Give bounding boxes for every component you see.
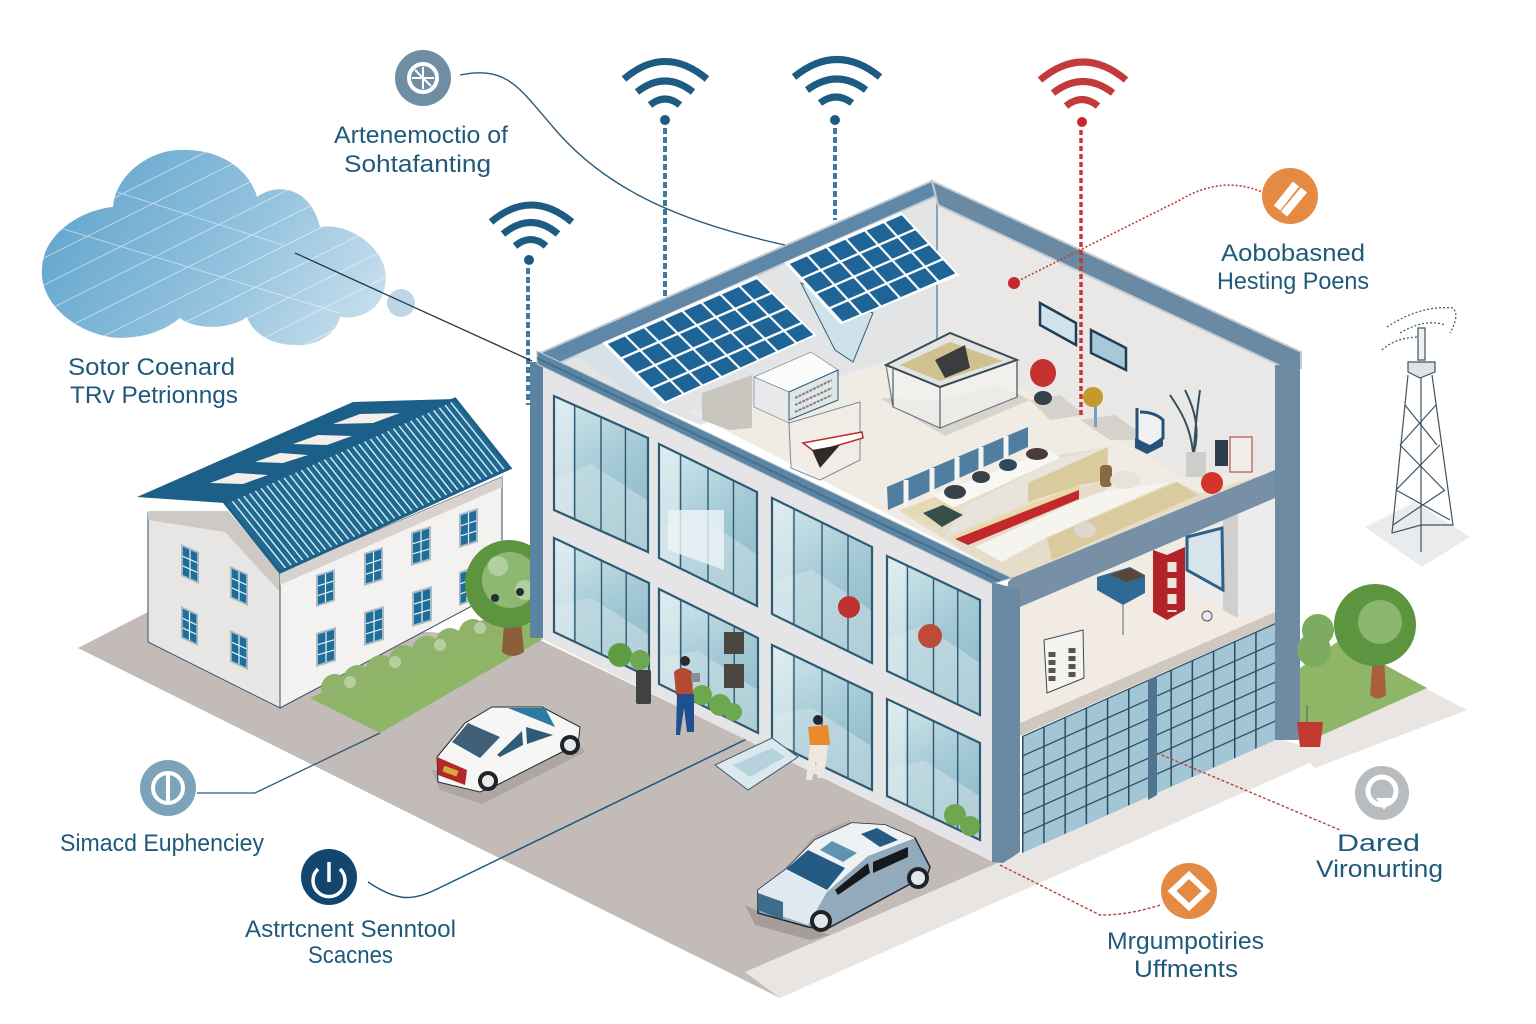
connector: artenemoctio line (460, 73, 785, 245)
interior: server cabinet (702, 352, 838, 430)
label: Sotor Coenard: Sotor Coenard (68, 354, 235, 381)
connector: dared line (1157, 753, 1340, 830)
right tree (1334, 584, 1416, 698)
wifi signal 3 (794, 60, 880, 220)
lower floor: blue equipment box (1097, 567, 1145, 635)
data link: power sensor line (368, 705, 868, 898)
floor beam (1005, 470, 1275, 612)
house ribbed roof (225, 399, 510, 572)
house side-wall windows (316, 508, 478, 667)
icon: orange hash (1262, 168, 1318, 224)
label: Dared Vironurting: Vironurting (1316, 856, 1443, 883)
front wall (540, 360, 993, 862)
connector: mrgump line (1000, 865, 1160, 915)
front windows lower row (554, 538, 980, 840)
left corner column (530, 362, 543, 638)
house end wall (148, 513, 280, 708)
front windows upper row (554, 396, 980, 715)
house eave shadow end (148, 511, 280, 592)
entrance mat (715, 738, 798, 790)
wifi signal 2 (624, 62, 707, 298)
label: Astrtcnent Senntool Scacnes (245, 916, 456, 969)
grey car (745, 820, 930, 940)
panel: cloud (42, 150, 415, 346)
label: Sotor Coenard: TRv Petrionngs (70, 382, 238, 409)
person in red (674, 656, 700, 735)
back-left parapet (540, 181, 938, 368)
back-left roof wall (548, 195, 937, 425)
shop window plants (692, 685, 980, 836)
front-right corner column (992, 582, 1020, 863)
red sensor dot (1008, 277, 1020, 289)
label: Artenemoctio of Sohtafanting: Sohtafanting (344, 151, 491, 178)
back-right interior wall (937, 195, 1288, 477)
label: Aobobasned Hesting Poens: Hesting Poens (1217, 268, 1369, 295)
label: Mrgumpotiries Uffments: Mrgumpotiries (1107, 928, 1264, 955)
interior: yellow lamp (1080, 387, 1150, 440)
interior: seating row (887, 427, 1028, 510)
icon: Simacd (140, 760, 196, 816)
cloud connector line (295, 253, 532, 361)
right corner column (1275, 365, 1300, 740)
icon: Artenemoctio gear (395, 50, 451, 106)
person in orange (806, 715, 830, 780)
interior: counter (900, 447, 1273, 580)
garage door divider (1148, 676, 1157, 800)
wifi signal 1 (491, 205, 572, 405)
front top beam (537, 351, 1012, 584)
house side wall (280, 477, 502, 708)
lower floor edge strip (1020, 612, 1275, 736)
connector: smart line (197, 733, 380, 793)
house eave shadow side (280, 477, 502, 585)
interior: wall art (1040, 303, 1126, 370)
garage door (1022, 623, 1275, 853)
label: Aobobasned Hesting Poens (1217, 240, 1369, 295)
ground: pavement (78, 612, 1000, 998)
lower grey column (1223, 514, 1238, 618)
back corner line (936, 197, 938, 345)
interior: desk (789, 402, 863, 480)
lower back wall (1187, 498, 1275, 618)
label: Dared Vironurting (1316, 830, 1443, 883)
ground: left lawn (310, 610, 550, 733)
upper floor (690, 345, 1273, 578)
lower floor: white kiosk (1044, 630, 1084, 693)
hedge (321, 611, 509, 702)
white car (432, 707, 585, 804)
house skylights (210, 413, 400, 484)
label: Simacd Euphenciey: Simacd Euphenciey (60, 830, 264, 857)
red plant pot (1297, 705, 1323, 747)
objects behind glass (668, 510, 942, 688)
icon: orange diamond (1161, 863, 1217, 919)
interior: red lamp (1030, 359, 1085, 420)
lower floor interior (1020, 498, 1275, 723)
label: Artenemoctio of Sohtafanting (334, 122, 508, 178)
icon: power (301, 849, 357, 905)
neighbouring house (137, 399, 553, 708)
solar panel left (577, 277, 815, 410)
ground: right lawn (1300, 640, 1427, 745)
icon: grey refresh (1355, 766, 1409, 820)
back-right parapet (932, 181, 1301, 368)
wifi signal 4 red (1040, 62, 1126, 415)
main building (530, 181, 1301, 863)
front planter (608, 643, 651, 704)
interior: plant and shelf items (1135, 390, 1252, 494)
label: Artenemoctio of Sohtafanting: Artenemoctio of (334, 122, 508, 149)
lower floor: red cabinet (1153, 547, 1185, 620)
lower floor: wall chart (1187, 528, 1223, 590)
label: Astrtcnent Senntool Scacnes: Scacnes (308, 942, 393, 969)
label: Mrgumpotiries Uffments: Uffments (1134, 956, 1238, 983)
interior: glass display case (880, 333, 1030, 436)
label: Mrgumpotiries Uffments (1107, 928, 1264, 983)
right bush (1297, 614, 1334, 667)
red sensor connector (1014, 185, 1262, 283)
label: Aobobasned Hesting Poens: Aobobasned (1221, 240, 1365, 267)
house end-wall windows (181, 544, 248, 670)
label: Sotor Coenard (68, 354, 238, 409)
ground: light walkway (745, 688, 1467, 998)
communications tower (1365, 308, 1470, 567)
label: Astrtcnent Senntool Scacnes: Astrtcnent Senntool (245, 916, 456, 943)
house flat roof slope (137, 399, 455, 503)
label: Dared Vironurting: Dared (1337, 830, 1420, 857)
tree by house (465, 540, 553, 656)
lower floor: small dial (1202, 611, 1212, 621)
solar panel right (786, 213, 958, 362)
